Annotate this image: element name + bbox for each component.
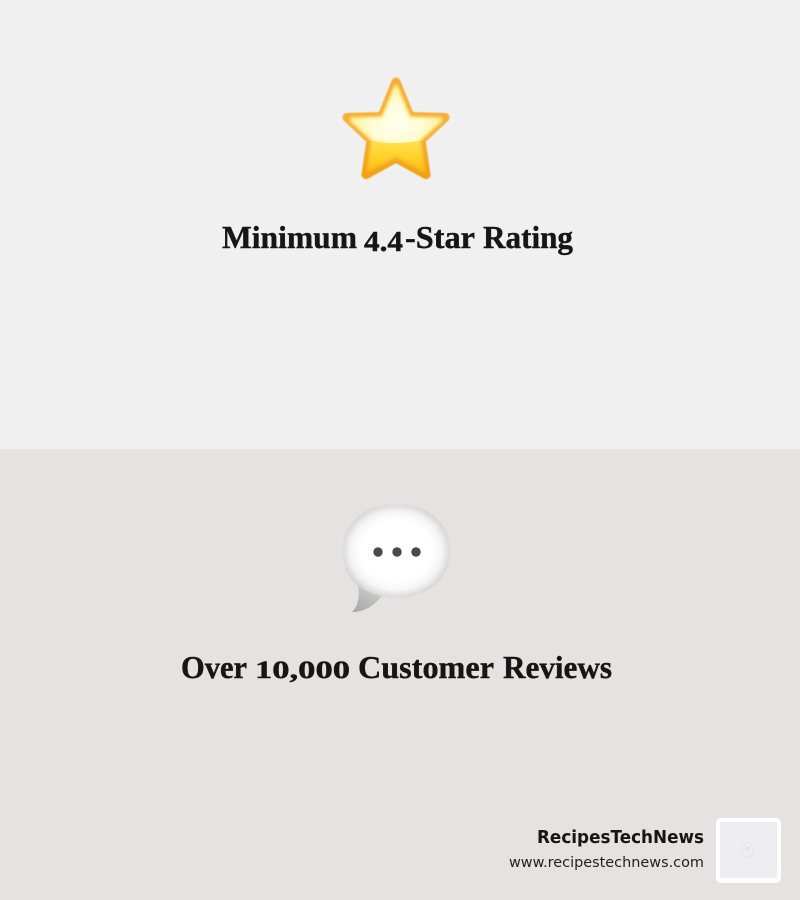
panel: star rating (0, 0, 800, 449)
heading: star rating: Minimum (222, 219, 357, 255)
heading: star rating: -Star (405, 219, 475, 255)
heading: star rating: 4.4 (364, 227, 403, 258)
heading: customer reviews: Over (181, 649, 247, 685)
logo box (716, 818, 781, 883)
heading: star rating: Rating (483, 219, 573, 255)
heading: customer reviews: Customer (358, 649, 494, 685)
heading: star rating (222, 219, 573, 258)
brand name: RecipesTechNews (537, 828, 704, 848)
heading: customer reviews (181, 649, 612, 685)
panel: customer reviews (0, 449, 800, 900)
icon: speech bubble (342, 504, 450, 612)
heading: customer reviews: Reviews (503, 649, 612, 685)
website url: www.recipestechnews.com (509, 855, 704, 871)
heading: customer reviews: 10,000 (255, 657, 350, 684)
icon: star (347, 82, 445, 174)
